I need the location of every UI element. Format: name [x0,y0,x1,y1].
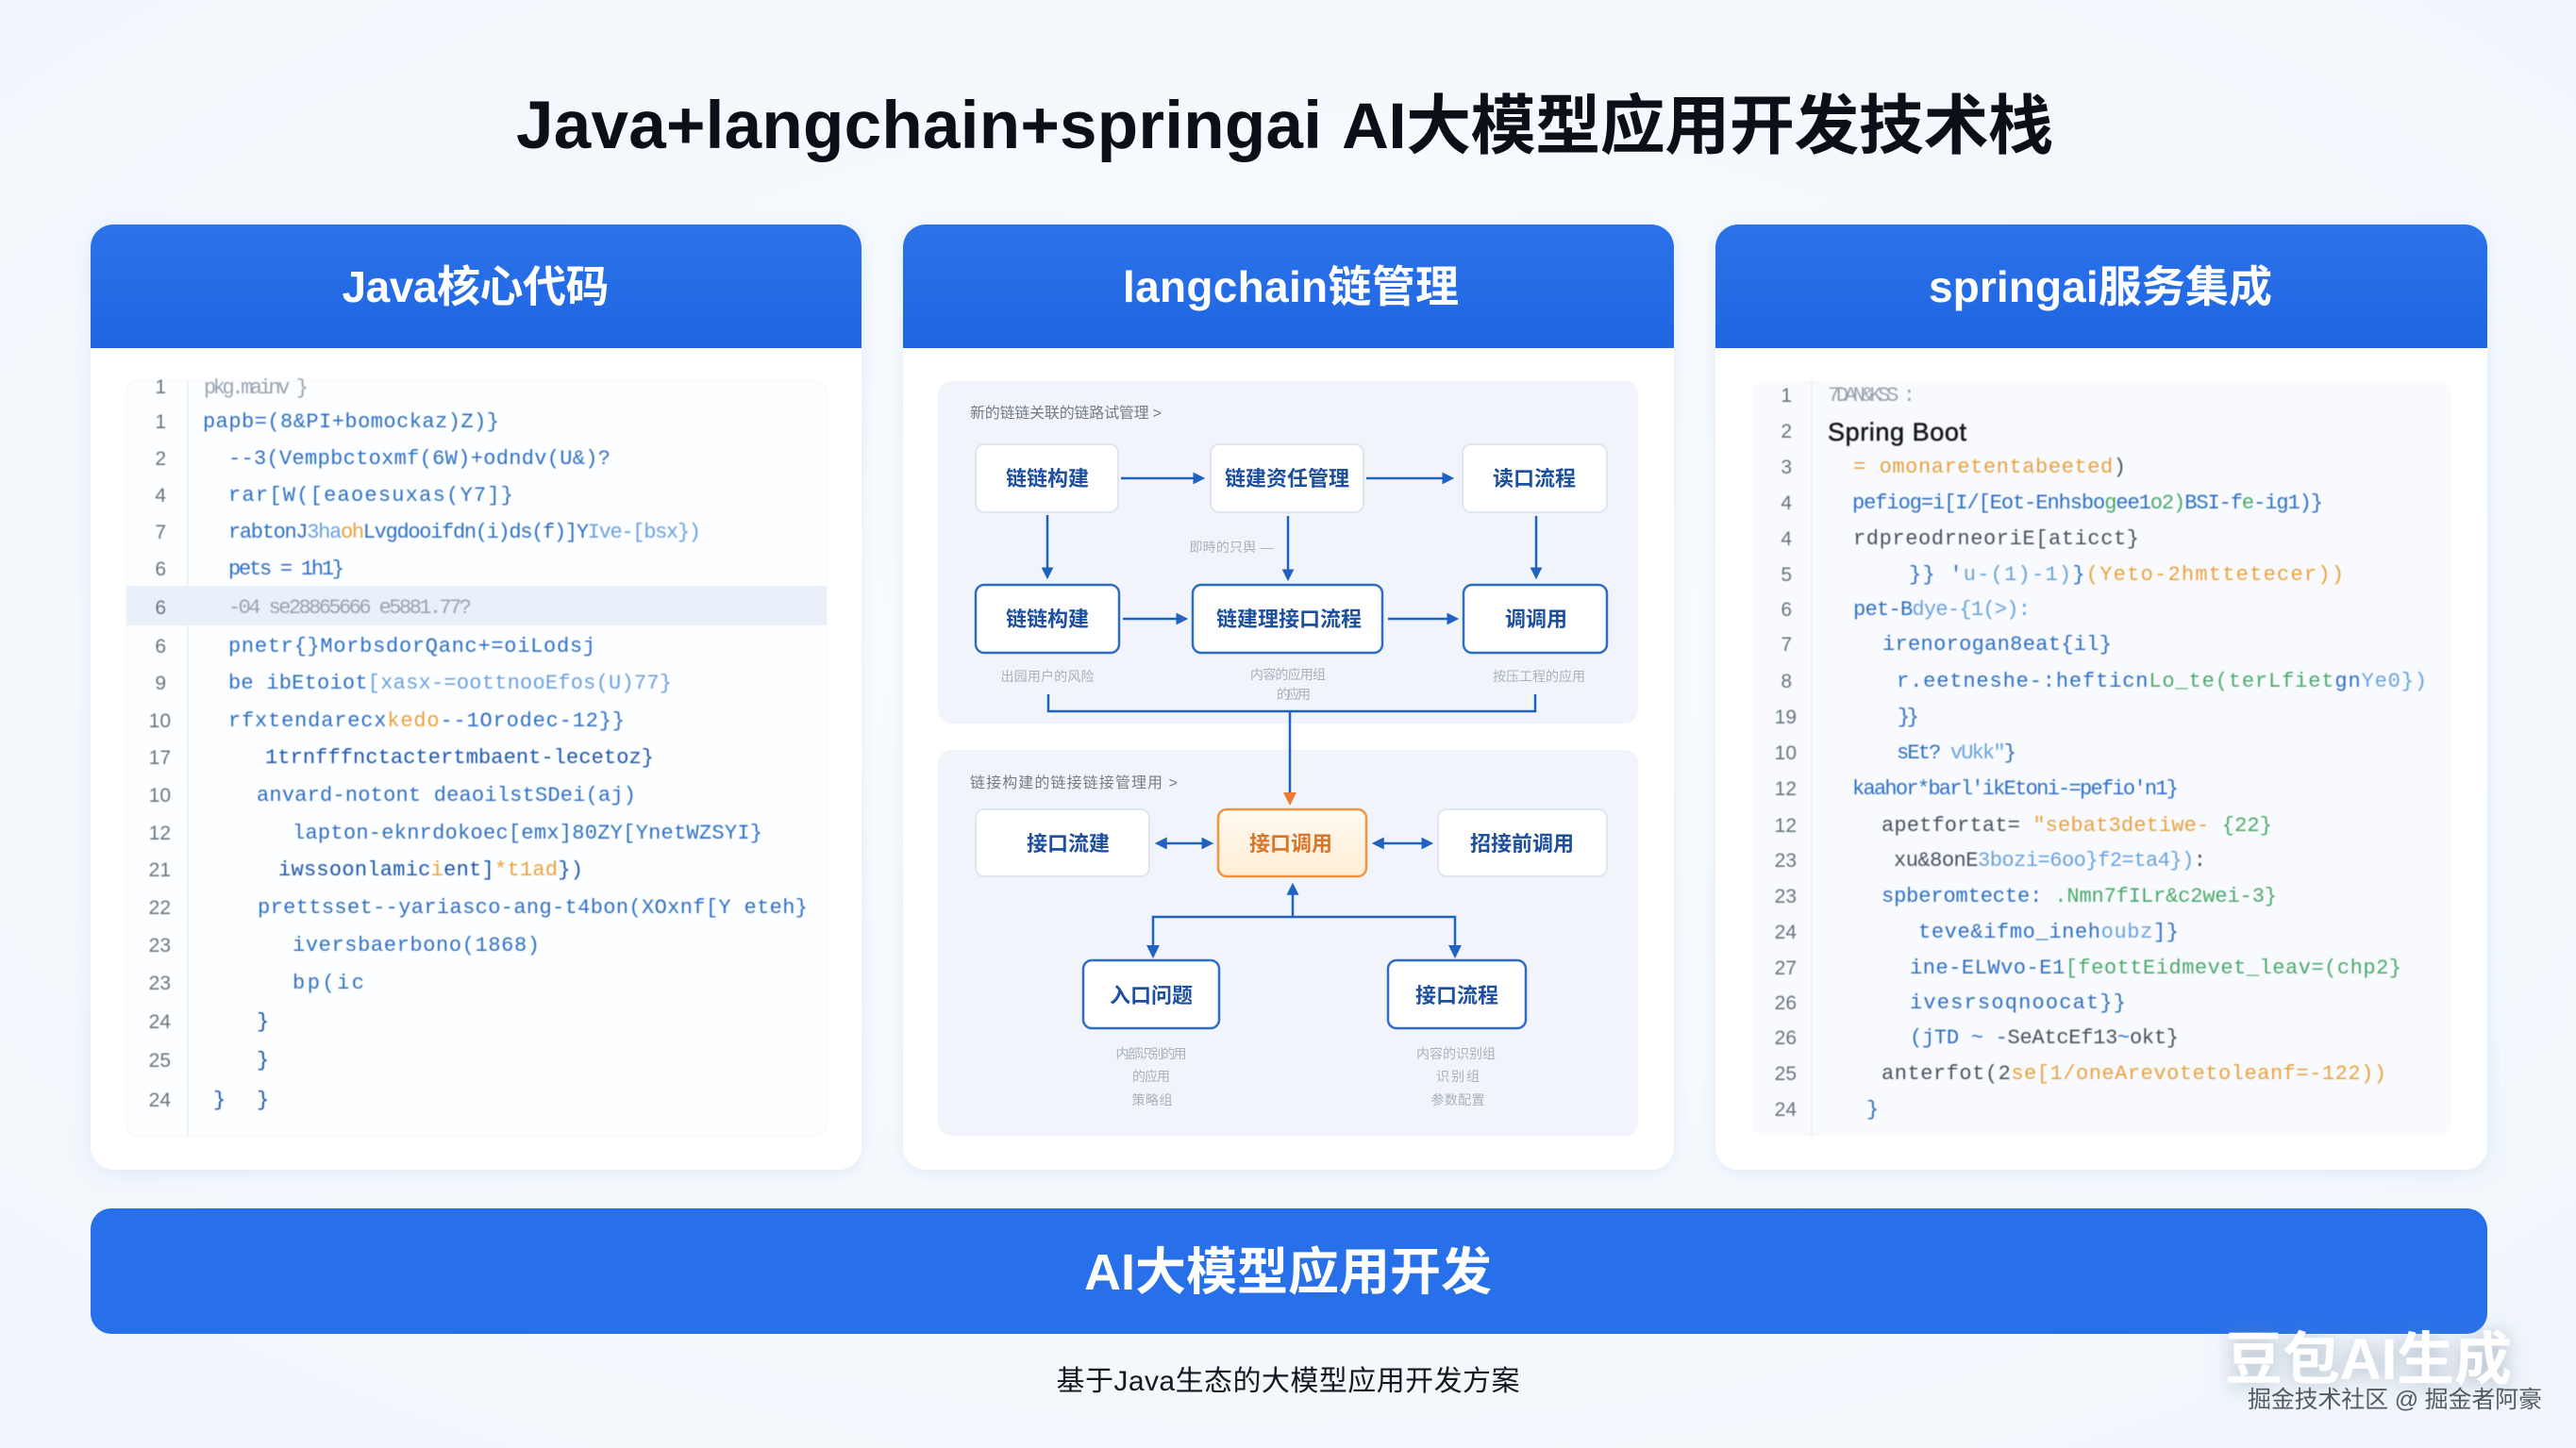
code editor: springai: 8 [1781,671,1792,692]
code editor: springai [1752,381,2451,1136]
flow captions: invocation: 识别组 [1436,1069,1480,1084]
code editor: Java: rar[W([eaoesuxas(Y7]} [228,484,513,508]
flow captions: chain building: 按压工程的应用 [1493,669,1585,684]
code editor: Java: iwssoonlamicient]*t1ad}) [278,858,583,882]
code editor: springai: Spring Boot [1828,418,1966,446]
flow node row: top: 链建资任管理 [1225,467,1349,491]
bottom banner: AI大模型应用开发 [1084,1244,1492,1301]
flow captions: chain building: 即時的只舆 — [1189,540,1274,555]
code editor: Java: rfxtendarecxkedo--1Orodec-12}} [228,709,625,733]
code editor: springai: 4 [1781,492,1792,514]
flow node row: middle: 链链构建 [1006,607,1089,631]
code editor: Java: 4 [155,485,166,507]
code editor: springai: } [1866,1098,1879,1122]
flow captions: chain building [1000,540,1585,702]
code editor: Java: } [257,1089,269,1112]
flow arrows: chain building [1047,478,1536,711]
watermark: 掘金技术社区 @ 掘金者阿豪 [2248,1387,2542,1413]
panel: langchain chain management [903,225,1674,1170]
flow arrows: invocation [1146,843,1462,958]
code editor: Java: pkg.mainv } [204,376,309,400]
code editor: springai: 3 [1781,457,1792,478]
panel header: springai: springai服务集成 [1929,262,2272,311]
code editor: springai: 12 [1775,778,1797,800]
code editor: Java: 21 [149,859,171,881]
flow captions: invocation [1115,1046,1496,1107]
flow node row: invocation: 招接前调用 [1470,832,1574,856]
flow node row: middle: 调调用 [1505,607,1567,631]
code editor: Java: 2 [155,448,166,470]
flow node row: invocation [976,809,1607,876]
code editor: Java [126,376,827,1136]
code editor: Java: bp(ic [293,972,364,995]
code editor: Java: --3(Vempbctoxmf(6W)+odndv(U&)? [228,447,611,471]
flow node row: middle: 链建理接口流程 [1216,607,1362,631]
flow node row: bottom [1083,960,1526,1028]
code editor: springai: apetfortat= "sebat3detiwe- {22} [1882,814,2272,838]
flow captions: invocation: 内容的识别组 [1416,1046,1496,1061]
bottom banner [91,1208,2487,1334]
code editor: springai: 24 [1775,922,1797,943]
code editor: Java: 17 [149,747,171,769]
flow section: chain building: 新的链链关联的链路试管理 > [970,405,1162,422]
code editor: springai: ine-ELWvo-E1[feottEidmevet_leav=(chp2} [1910,957,2401,980]
code editor: Java: 12 [149,823,171,844]
flow section: chain building [938,381,1638,724]
code editor: Java: 9 [155,673,166,694]
code editor: springai: pefiog=i[I/[Eot-Enhsbogee1o2)BSI-fe-ig1)} [1852,491,2323,515]
code editor: Java: iversbaerbono(1868) [293,934,540,957]
code editor: springai: 7 [1781,634,1792,656]
code editor: springai: 4 [1781,528,1792,550]
code editor: springai: 25 [1775,1063,1797,1085]
code editor: springai: 12 [1775,815,1797,837]
flow node row: top: 读口流程 [1493,467,1576,491]
code editor: Java: papb=(8&PI+bomockaz)Z)} [203,410,499,434]
flow node row: bottom: 入口问题 [1110,984,1193,1007]
flow node row: top: 链链构建 [1006,467,1089,491]
code editor: springai: sEt? vUkk"} [1897,741,2016,765]
code editor: springai: 26 [1775,1027,1797,1049]
code editor: Java: rabtonJ3haohLvgdooifdn(i)ds(f)]YIve-[bsx}) [228,521,701,544]
code editor: Java: 6 [155,636,166,657]
code editor: springai: rdpreodrneoriE[aticct} [1853,527,2139,551]
code editor: springai: xu&8onE3bozi=6oo}f2=ta4}): [1894,849,2206,873]
code editor: Java: 24 [149,1090,171,1111]
watermark: 豆包AI生成 [2225,1327,2512,1391]
flow section: interface invocation [938,750,1638,1136]
flow node row: top [976,444,1607,512]
code editor: springai: 23 [1775,850,1797,872]
code editor: springai: (jTD ~ -SeAtcEf13~okt} [1910,1026,2179,1050]
code editor: Java: 22 [149,897,171,919]
panel: Java core code [91,225,861,1170]
flow node row: middle [976,585,1607,653]
code editor: springai: 27 [1775,957,1797,979]
flow captions: chain building: 内容的应用组 [1250,667,1326,682]
connector arrow: into invocation node [1283,711,1296,806]
code editor: springai: 26 [1775,992,1797,1014]
code editor: springai: 5 [1781,564,1792,586]
code editor: springai: 19 [1775,707,1797,728]
subtitle: 基于Java生态的大模型应用开发方案 [1057,1366,1519,1397]
flow node row: bottom: 接口流程 [1415,984,1498,1007]
watermark [2225,1327,2542,1413]
code editor: Java: anvard-notont deaoilstSDei(aj) [257,784,636,807]
code editor: springai: spberomtecte: .Nmn7fILr&c2wei-3} [1882,885,2277,908]
code editor: springai: anterfot(2se[1/oneArevotetoleanf=-122)) [1882,1062,2386,1086]
code editor: springai: 24 [1775,1099,1797,1121]
flow section: interface invocation: 链接构建的链接链接管理用 > [970,774,1178,791]
code editor: springai: }} [1898,706,1919,729]
code editor: Java: 1 [155,411,166,433]
flow node row: invocation: 接口调用 [1249,832,1332,856]
code editor: Java: prettsset--yariasco-ang-t4bon(XOxnf[Y eteh} [258,896,808,920]
panel header: langchain: langchain链管理 [1123,262,1459,311]
code editor: Java: 23 [149,973,171,994]
code editor: springai: teve&ifmo_inehoubz]} [1918,921,2179,944]
code editor: springai: kaahor*barl'ikEtoni-=pefio'n1} [1852,777,2179,801]
code editor: springai: r.eetneshe-:hefticnLo_te(terLfietgnYe0}) [1897,670,2427,693]
flow captions: invocation: 内部识别的用 [1115,1046,1187,1061]
code editor: springai: 7DAN&KSS : [1828,384,1915,408]
code editor: Java: pnetr{}MorbsdorQanc+=oiLodsj [228,635,595,658]
code editor: springai: 23 [1775,886,1797,907]
title: Java+langchain+springai [516,89,1322,163]
code editor: springai: 1 [1781,385,1792,407]
code editor: Java: 23 [149,935,171,957]
code editor: Java: pets = 1h1} [228,558,344,581]
flow captions: invocation: 的应用 [1132,1069,1170,1084]
flow captions: invocation: 策略组 [1132,1092,1172,1107]
title [516,89,2053,163]
code editor: Java: } [257,1010,269,1034]
code editor: Java: 10 [149,785,171,807]
code editor: Java: 6 [155,597,166,619]
code editor: springai: ivesrsoqnoocat}} [1910,991,2126,1015]
panel: springai service integration [1715,225,2487,1170]
code editor: Java: } [213,1089,226,1112]
code editor: Java: be ibEtoiot[xasx-=oottnooEfos(U)77} [228,672,672,695]
code editor: Java: 1trnfffnctactertmbaent-lecetoz} [265,746,654,770]
code editor: Java: 7 [155,522,166,543]
code editor: Java: 10 [149,710,171,732]
title: AI大模型应用开发技术栈 [1342,90,2053,162]
code editor: springai: 2 [1781,421,1792,442]
code editor: springai: 10 [1775,742,1797,764]
code editor: springai: }} 'u-(1)-1)}(Yeto-2hmttetecer)) [1909,563,2344,587]
code editor: Java: lapton-eknrdokoec[emx]80ZY[YnetWZSYI} [293,822,762,845]
code editor: springai: pet-Bdye-{1(>): [1853,598,2031,622]
code editor: Java: 24 [149,1011,171,1033]
code editor: Java: 25 [149,1050,171,1072]
panel header: springai [1715,225,2487,348]
flow captions: chain building: 出园用户的风险 [1000,669,1095,684]
flow node row: invocation: 接口流建 [1027,832,1110,856]
code editor: springai: irenorogan8eat{il} [1882,633,2112,657]
panel header: Java: Java核心代码 [342,262,610,311]
flow captions: chain building: 的应用 [1277,687,1311,702]
code editor: Java: -04 se28865666 e5881.77? [228,596,472,620]
panel header: langchain [903,225,1674,348]
code editor: Java: 1 [155,376,166,398]
flow captions: invocation: 参数配置 [1430,1092,1485,1107]
panel header: Java [91,225,861,348]
code editor: Java: 6 [155,558,166,580]
code editor: springai: = omonaretentabeeted) [1853,456,2126,479]
code editor: Java: } [257,1049,269,1073]
code editor: springai: 6 [1781,599,1792,621]
